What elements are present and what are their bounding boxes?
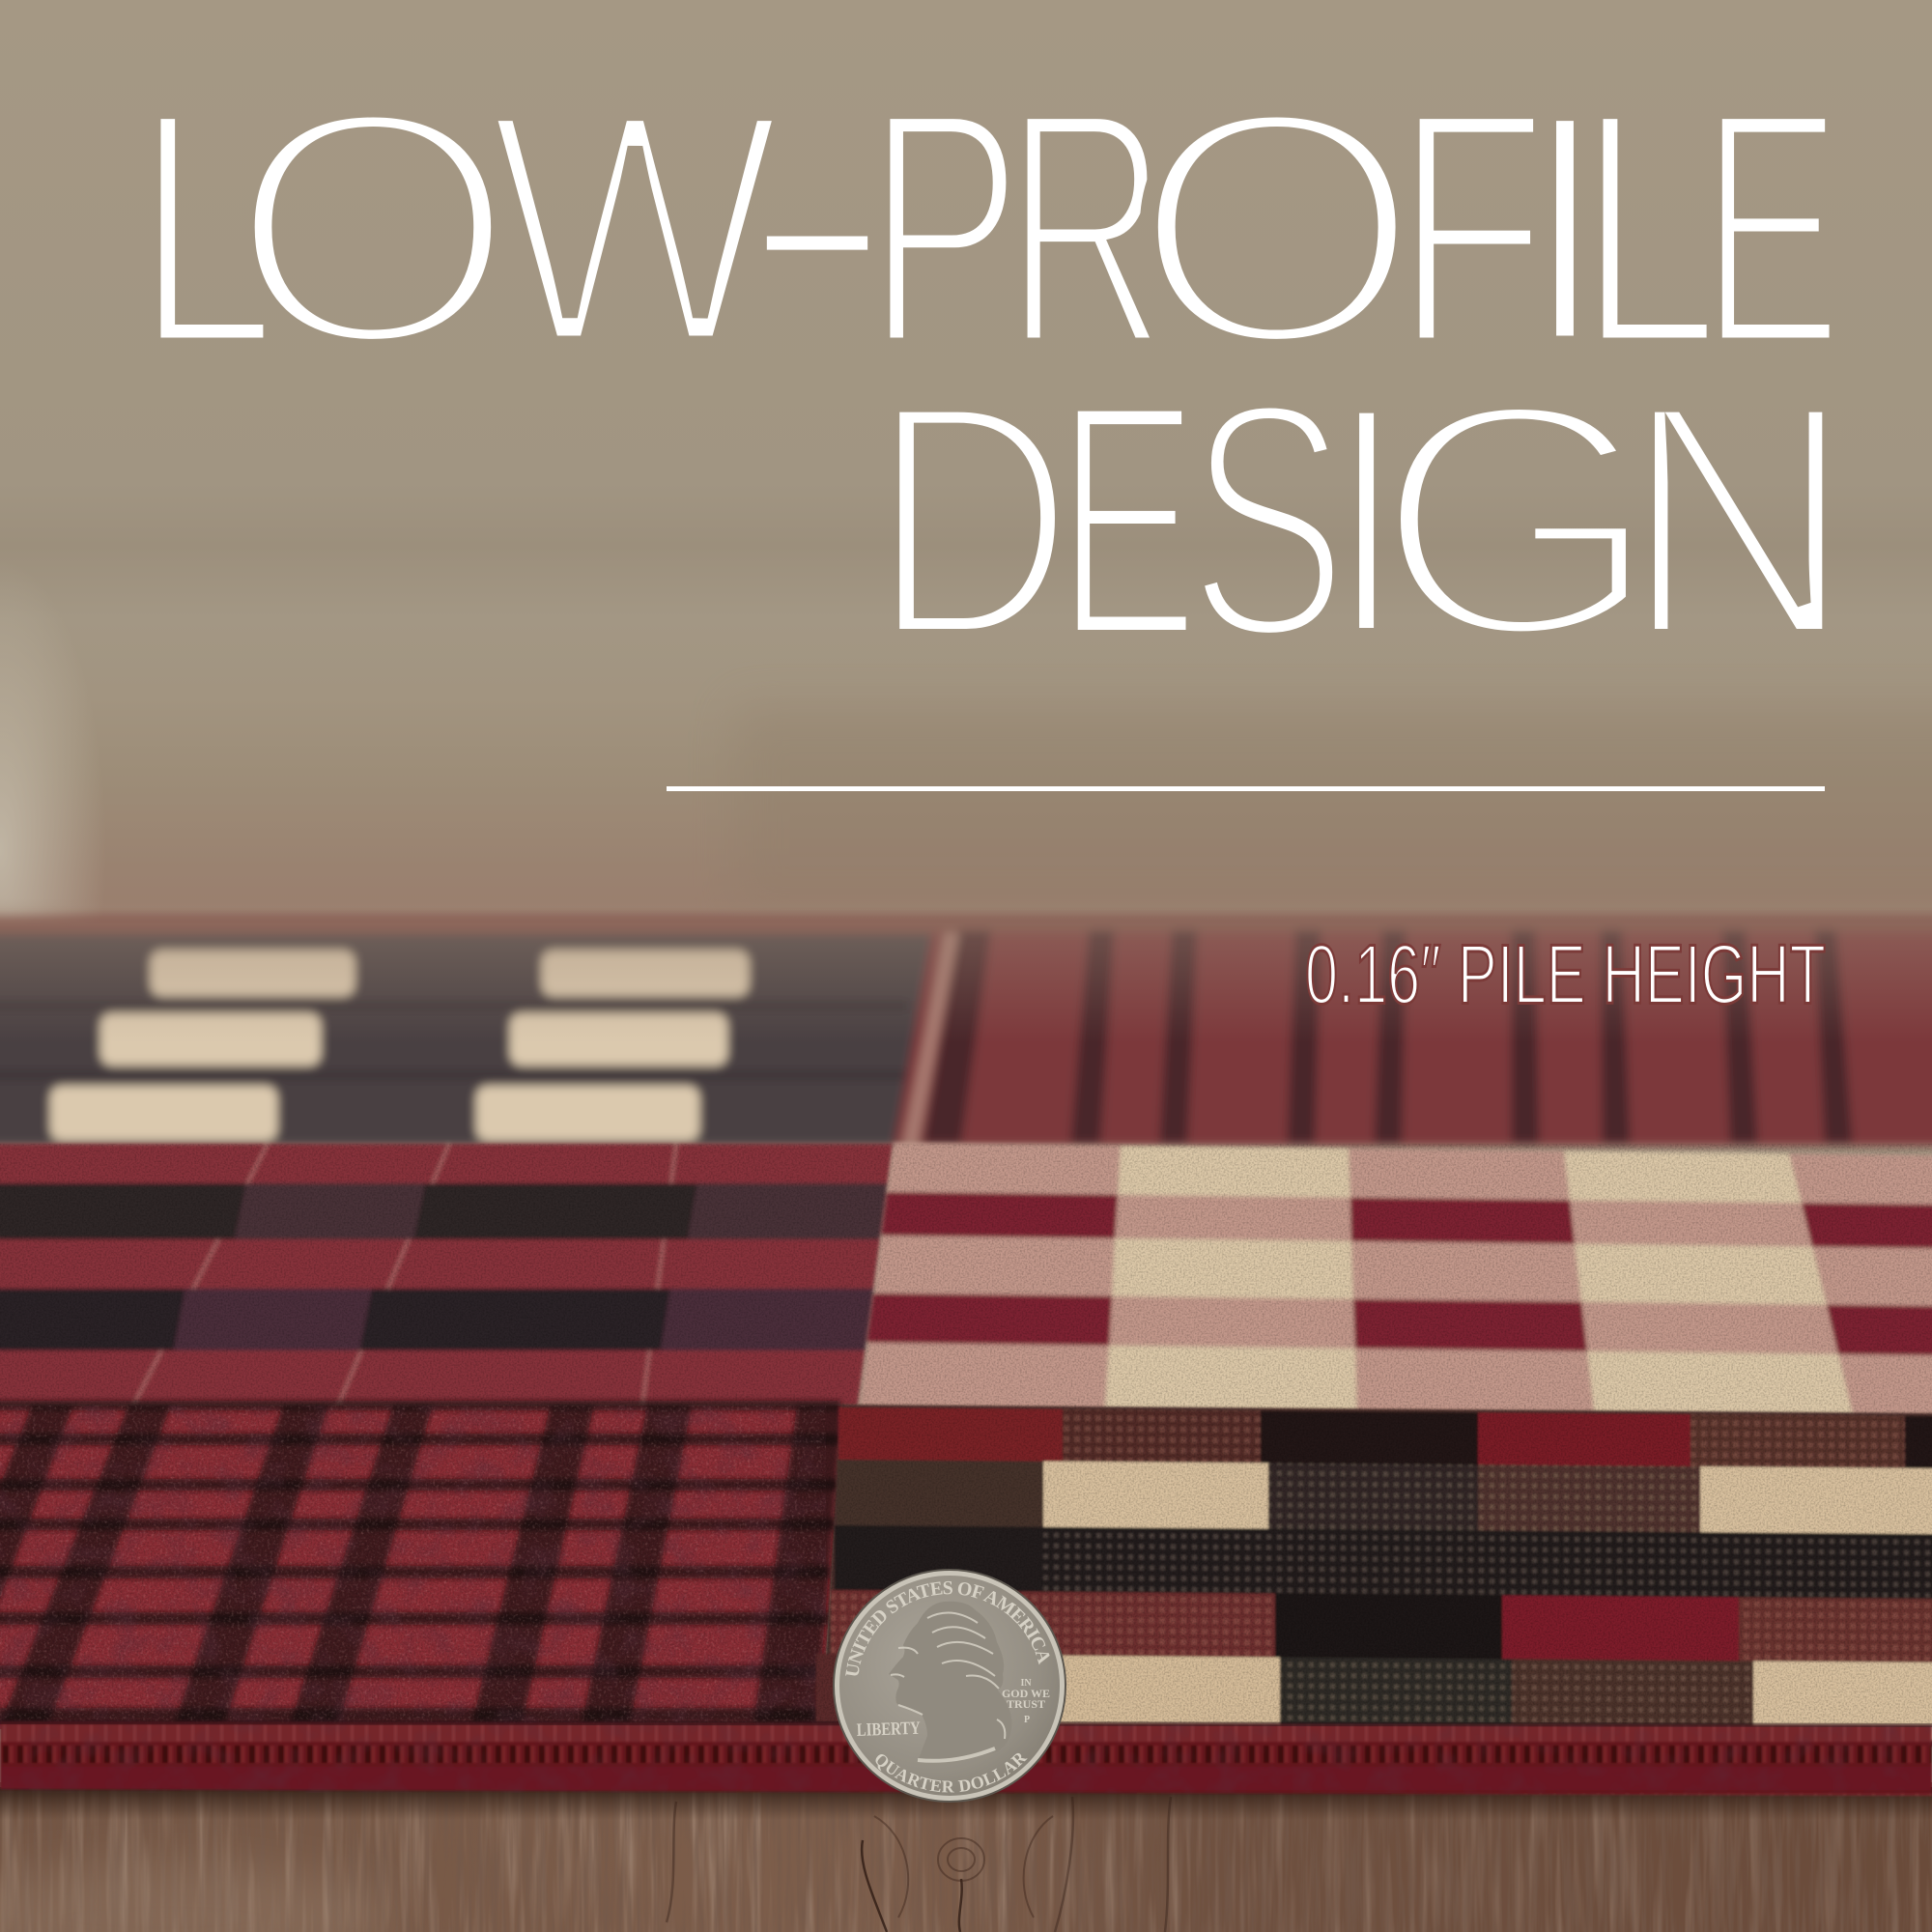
title: P [867, 40, 1023, 415]
check row 4 [831, 1590, 1932, 1662]
coin inscriptions: UNITED STATES OF AMERICA [845, 1580, 1049, 1676]
title: S [1188, 332, 1349, 707]
title: R [1005, 40, 1168, 415]
title: L [1577, 40, 1719, 415]
rug bound edge [0, 1719, 1932, 1796]
divider rule [667, 786, 1825, 791]
title: D [870, 332, 1074, 707]
coin inscriptions [845, 1580, 1050, 1793]
coin inscriptions: LIBERTY [856, 1719, 921, 1741]
coin inscriptions: GOD WE [1002, 1687, 1050, 1700]
coin inscriptions: TRUST [1007, 1697, 1045, 1711]
check row 5 [816, 1654, 1932, 1740]
title: I [1511, 40, 1619, 415]
title: I [1321, 332, 1412, 707]
coin inscriptions: P [1024, 1715, 1030, 1725]
title: F [1394, 40, 1548, 415]
check row 2 [837, 1460, 1932, 1534]
rug far section, out of focus [0, 918, 1932, 1146]
coin inscriptions: IN [1020, 1678, 1032, 1689]
title: E [1701, 40, 1842, 415]
title: L [135, 40, 276, 415]
background wall and blurred floor [0, 0, 1932, 1140]
icon: quarter dollar coin [833, 1569, 1066, 1803]
rug near section: small red plaid panel [0, 1401, 842, 1729]
check row 1 [838, 1407, 1932, 1468]
icon: wood knot [874, 1816, 1053, 1918]
haze over the rug's far edge [0, 898, 1932, 1043]
rug middle section: dark plaid panel [0, 1144, 894, 1406]
fabric grain over the rug [0, 1144, 1932, 1723]
title: N [1621, 332, 1856, 707]
title [135, 28, 1856, 707]
title: O [228, 40, 518, 415]
title: O [1131, 40, 1423, 415]
title: - [736, 28, 898, 404]
check row 3 [835, 1525, 1932, 1599]
coin portrait [889, 1602, 1011, 1762]
title: G [1373, 332, 1662, 707]
wood floor with plank grain [0, 1782, 1932, 1932]
coin inscriptions: QUARTER DOLLAR [875, 1752, 1028, 1793]
title: E [1056, 332, 1199, 707]
rug near section: black, red and cream check panel [816, 1405, 1932, 1747]
rug middle section: red and cream gingham panel [858, 1143, 1932, 1432]
title: W [487, 40, 786, 415]
